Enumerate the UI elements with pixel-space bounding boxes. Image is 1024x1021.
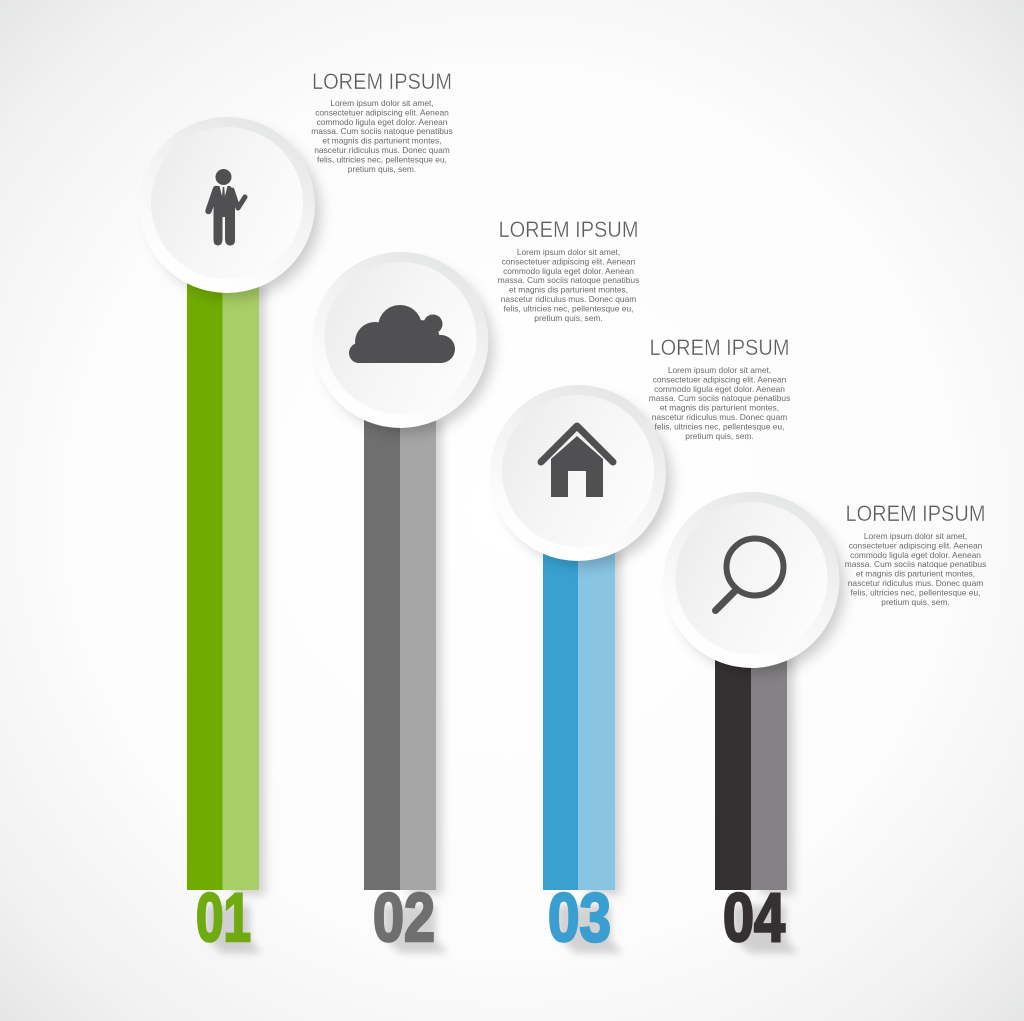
heading 4: LOREM IPSUM [846, 501, 986, 526]
heading 3: LOREM IPSUM [650, 335, 790, 360]
bar 4 [715, 640, 787, 890]
body 2: et magnis dis parturient montes, [509, 285, 628, 295]
body 1: massa. Cum sociis natoque penatibus [311, 126, 453, 136]
column 1 [139, 69, 453, 956]
bar 1 shadow [232, 285, 265, 895]
text block 2 [498, 217, 639, 323]
body 2: Lorem ipsum dolor sit amet, [517, 247, 620, 257]
body 2: nascetur ridiculus mus. Donec quam [501, 294, 636, 304]
body 4: consectetuer adipiscing elit. Aenean [849, 540, 983, 550]
number 03 shadow [557, 905, 623, 953]
bar 3 [543, 535, 615, 890]
body 1: et magnis dis parturient montes, [322, 136, 442, 146]
body 3: commodo ligula eget dolor. Aenean [654, 384, 785, 394]
number 01: 01 [196, 879, 251, 956]
number 04 shadow [732, 905, 798, 953]
bar 1 [187, 270, 259, 890]
body 3: consectetuer adipiscing elit. Aenean [653, 374, 787, 384]
text block 1 [311, 69, 453, 174]
body 3 [649, 365, 790, 441]
bar 2 shadow [409, 420, 442, 895]
body 2: pretium quis, sem. [534, 313, 603, 323]
circle 4 shadow [674, 503, 844, 673]
body 1: Lorem ipsum dolor sit amet, [330, 98, 434, 108]
body 4: et magnis dis parturient montes, [856, 569, 975, 579]
circle 1 shadow [150, 128, 320, 298]
body 2: massa. Cum sociis natoque penatibus [498, 275, 639, 285]
icon: cloud [349, 305, 455, 363]
body 3: pretium quis, sem. [685, 431, 754, 441]
column 2 [312, 217, 639, 956]
heading 2: LOREM IPSUM [498, 217, 638, 242]
bar 4 shadow [761, 655, 794, 895]
body 1: commodo ligula eget dolor. Aenean [317, 117, 448, 127]
icon: magnifying glass [716, 538, 784, 610]
bar 3 shadow [588, 550, 621, 895]
body 4: felis, ultricies nec, pellentesque eu, [851, 587, 980, 597]
body 2: felis, ultricies nec, pellentesque eu, [504, 303, 633, 313]
body 4: Lorem ipsum dolor sit amet, [864, 531, 967, 541]
heading 1: LOREM IPSUM [312, 69, 452, 94]
circle 3 shadow [501, 396, 671, 566]
body 2: commodo ligula eget dolor. Aenean [503, 266, 634, 276]
column 4 [664, 492, 986, 956]
body 2 [498, 247, 639, 323]
circle 3 [490, 385, 666, 561]
body 3: nascetur ridiculus mus. Donec quam [652, 412, 787, 422]
circle 4 [664, 492, 840, 668]
icon: businessman [208, 169, 245, 246]
body 2: consectetuer adipiscing elit. Aenean [502, 256, 636, 266]
body 1: felis, ultricies nec, pellentesque eu, [317, 154, 447, 164]
body 3: massa. Cum sociis natoque penatibus [649, 393, 790, 403]
icon: house [541, 426, 613, 497]
body 4 [845, 531, 986, 607]
body 3: et magnis dis parturient montes, [660, 403, 779, 413]
text block 3 [649, 335, 790, 441]
text block 4 [845, 501, 986, 607]
bar 2 [364, 405, 436, 890]
number 04: 04 [723, 879, 785, 956]
circle 2 shadow [323, 263, 493, 433]
circle 2 [312, 252, 488, 428]
body 4: commodo ligula eget dolor. Aenean [850, 550, 981, 560]
number 03: 03 [548, 879, 611, 956]
column 3 [490, 335, 790, 956]
body 3: felis, ultricies nec, pellentesque eu, [655, 421, 784, 431]
body 4: nascetur ridiculus mus. Donec quam [848, 578, 983, 588]
body 4: pretium quis, sem. [881, 597, 950, 607]
body 3: Lorem ipsum dolor sit amet, [668, 365, 771, 375]
body 1: consectetuer adipiscing elit. Aenean [315, 107, 449, 117]
number 02: 02 [373, 879, 435, 956]
body 4: massa. Cum sociis natoque penatibus [845, 559, 986, 569]
circle 1 [139, 117, 315, 293]
number 02 shadow [382, 905, 448, 953]
body 1: nascetur ridiculus mus. Donec quam [314, 145, 450, 155]
body 1: pretium quis, sem. [348, 164, 416, 174]
number 01 shadow [205, 905, 262, 953]
body 1 [311, 98, 453, 174]
